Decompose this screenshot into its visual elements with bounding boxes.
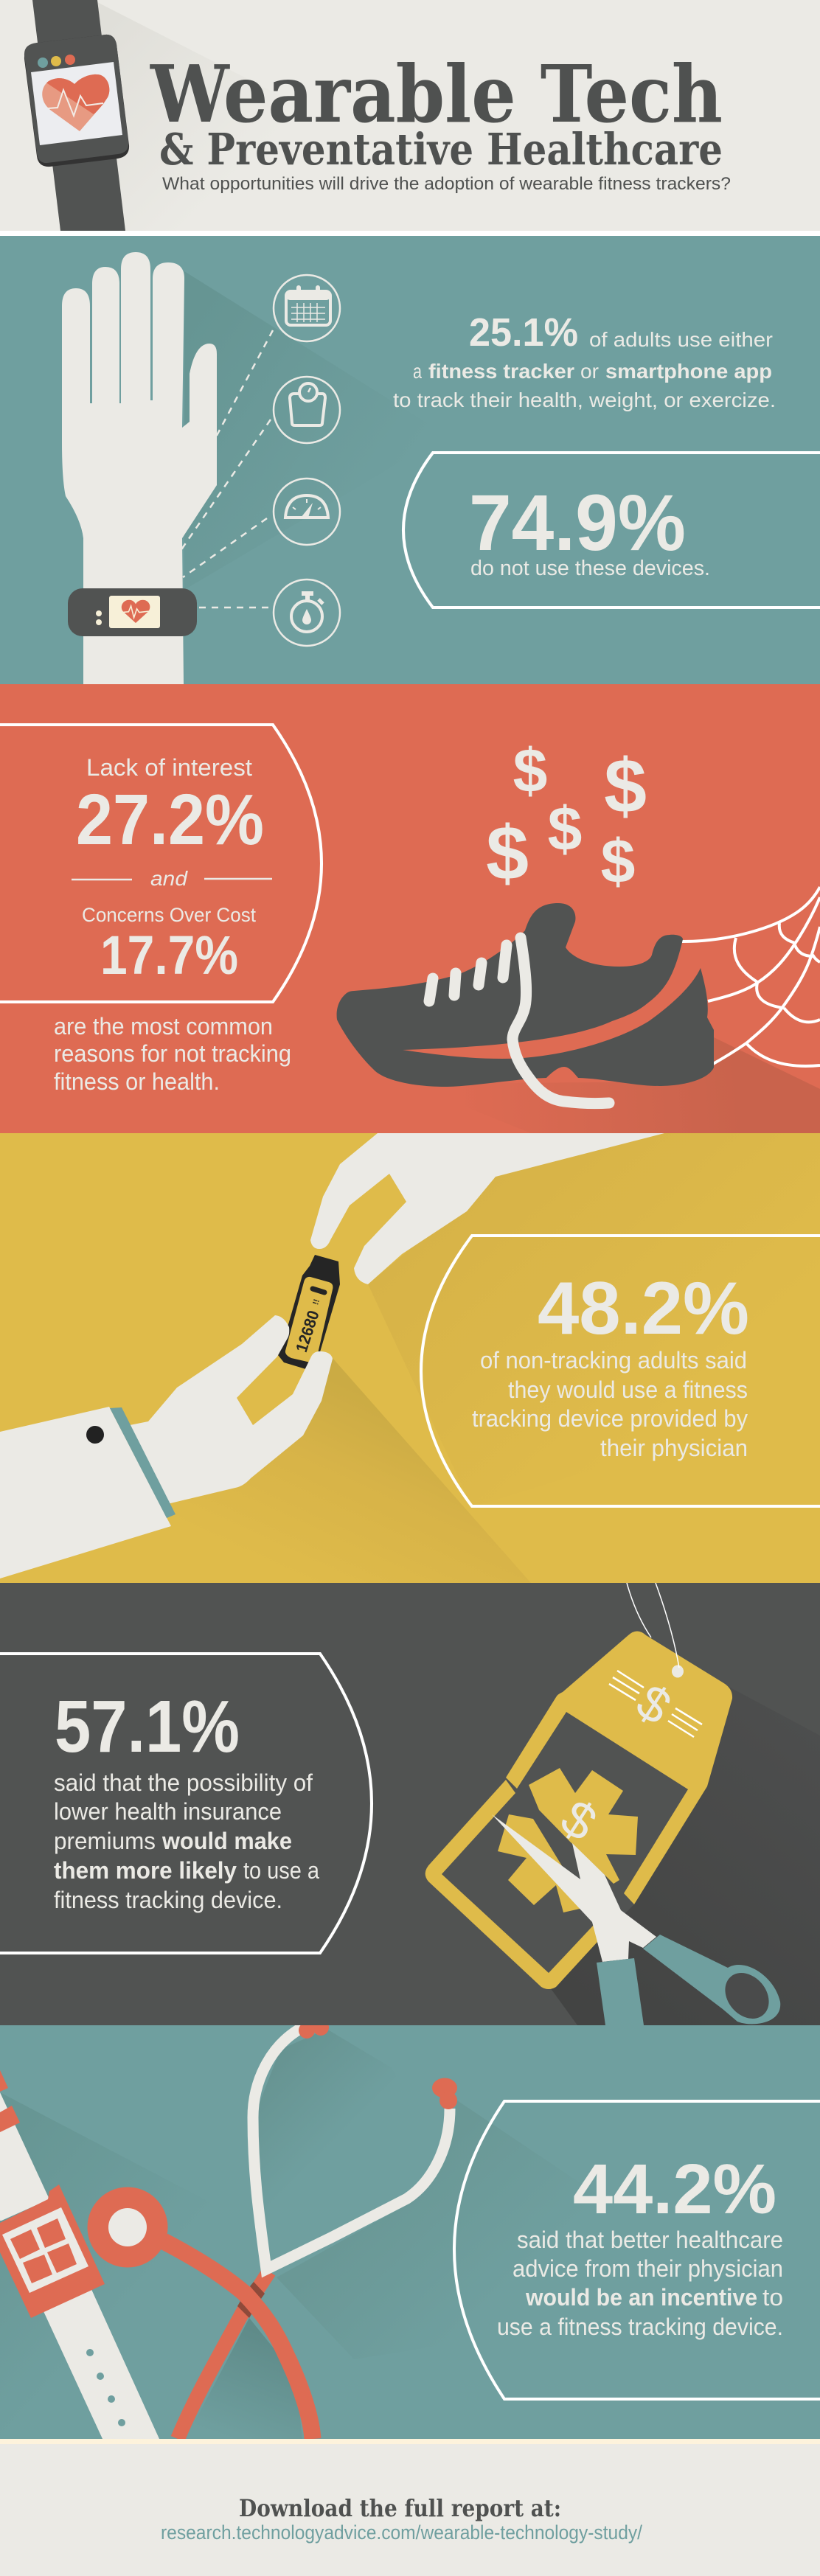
illustration: wristwatch: [0, 2070, 159, 2439]
icons: dollar signs: $: [604, 744, 647, 829]
footer link: research.technologyadvice.com/wearable-technology-study/: [161, 2521, 642, 2544]
callout: 57.1%: said that the possibility of: [54, 1769, 313, 1796]
illustration: fitness tracker device: 12680: [292, 1308, 323, 1354]
callout: 48.2%: they would use a fitness: [508, 1376, 748, 1403]
callout: lack of interest and cost: 27.2%: [76, 779, 264, 860]
text: common reasons: are the most common: [54, 1013, 273, 1040]
illustration: lower hand with sleeve: [0, 1315, 333, 1578]
illustration: fitness tracker device: !!: [311, 1298, 322, 1306]
panel: physician-provided device: [0, 1133, 820, 1583]
callout: 44.2%: would be an incentive: [525, 2284, 757, 2311]
icons: dollar signs: [486, 736, 647, 897]
panel: physician advice: [0, 2019, 820, 2439]
icons: dollar signs: $: [486, 811, 529, 897]
illustration: upper hand: [310, 1133, 664, 1284]
subtitle: What opportunities will drive the adoption of wearable fitness trackers?: [162, 174, 731, 194]
callout: 57.1%: lower health insurance: [54, 1798, 282, 1825]
callout: 57.1%: to use a: [243, 1857, 319, 1884]
text: common reasons: fitness or health.: [54, 1068, 220, 1095]
callout: 48.2%: 48.2%: [538, 1267, 749, 1350]
callout: lack of interest and cost: and: [150, 867, 189, 890]
callout: 48.2%: their physician: [600, 1435, 748, 1461]
connector lines: [139, 330, 273, 608]
title: & Preventative Healthcare: [159, 124, 723, 175]
callout: lack of interest and cost: [0, 725, 322, 1002]
icons: dollar signs: $: [601, 826, 635, 896]
callout: 57.1%: them more likely: [54, 1857, 237, 1884]
stat: 25.1% use trackers: of adults use either: [589, 328, 773, 351]
shoe shadow: [408, 1037, 820, 1133]
panel: reasons for not tracking: [0, 684, 820, 1133]
callout: 44.2%: to: [762, 2284, 783, 2311]
callout: 57.1%: 57.1%: [55, 1685, 240, 1768]
title: Wearable Tech: [150, 49, 723, 141]
panel: insurance premiums: [0, 1583, 820, 2027]
text: common reasons: [54, 1013, 291, 1095]
icon: calendar: [274, 275, 340, 341]
illustration: cut price tag with medical star: [425, 1583, 732, 1989]
illustration: scissors: [492, 1814, 780, 2027]
illustration: cut price tag with medical star: $: [552, 1789, 607, 1852]
stat: 25.1% use trackers: a: [413, 360, 422, 383]
callout: 74.9%: [403, 453, 820, 608]
icon: scale: [274, 377, 340, 443]
callout: 57.1%: [0, 1654, 372, 1953]
callout: 74.9%: 74.9%: [469, 478, 686, 567]
illustration: stethoscope: [87, 2019, 457, 2439]
icons: dollar signs: $: [513, 736, 547, 805]
panel: footer: [0, 2439, 820, 2576]
illustration: spider web: [682, 887, 820, 1066]
callout: lack of interest and cost: 17.7%: [100, 925, 238, 986]
icon: stopwatch: [274, 579, 340, 646]
callout: 44.2%: said that better healthcare: [517, 2227, 783, 2253]
text: common reasons: reasons for not tracking: [54, 1040, 291, 1067]
callout: 48.2%: of non-tracking adults said: [480, 1347, 747, 1374]
callout: 57.1%: would make: [161, 1828, 292, 1854]
callout: 74.9%: do not use these devices.: [470, 557, 710, 580]
callout: 48.2%: tracking device provided by: [472, 1405, 748, 1432]
stat: 25.1% use trackers: [393, 310, 776, 411]
illustration: cut price tag with medical star: $: [627, 1674, 681, 1736]
stat: 25.1% use trackers: to track their health, weight, or exercize.: [393, 389, 776, 411]
icons: dollar signs: $: [548, 794, 582, 863]
illustration: fitness tracker device: [278, 1255, 340, 1370]
illustration: hand with fitness band: [62, 252, 217, 684]
callout: lack of interest and cost: Lack of interest: [86, 754, 252, 781]
stat: 25.1% use trackers: fitness tracker: [428, 360, 574, 383]
callout: 44.2%: advice from their physician: [512, 2255, 783, 2282]
callout: 48.2%: [421, 1236, 820, 1506]
panel: header: [0, 0, 820, 231]
stat: 25.1% use trackers: or: [580, 360, 599, 383]
illustration: running shoe: [337, 903, 714, 1104]
stat: 25.1% use trackers: smartphone app: [605, 360, 772, 383]
icon: smartwatch: [24, 0, 129, 231]
callout: 44.2%: use a fitness tracking device.: [497, 2314, 783, 2340]
callout: 57.1%: premiums: [54, 1828, 156, 1854]
footer heading: Download the full report at:: [239, 2494, 561, 2522]
callout: 44.2%: [454, 2101, 820, 2399]
callout: 57.1%: fitness tracking device.: [54, 1887, 282, 1913]
icon: speedometer: [274, 478, 340, 545]
callout: 44.2%: 44.2%: [573, 2150, 776, 2229]
panel: adoption of trackers: [0, 236, 820, 684]
title: [150, 49, 723, 175]
callout: lack of interest and cost: Concerns Over Cost: [82, 904, 256, 926]
stat: 25.1% use trackers: 25.1%: [469, 310, 578, 355]
